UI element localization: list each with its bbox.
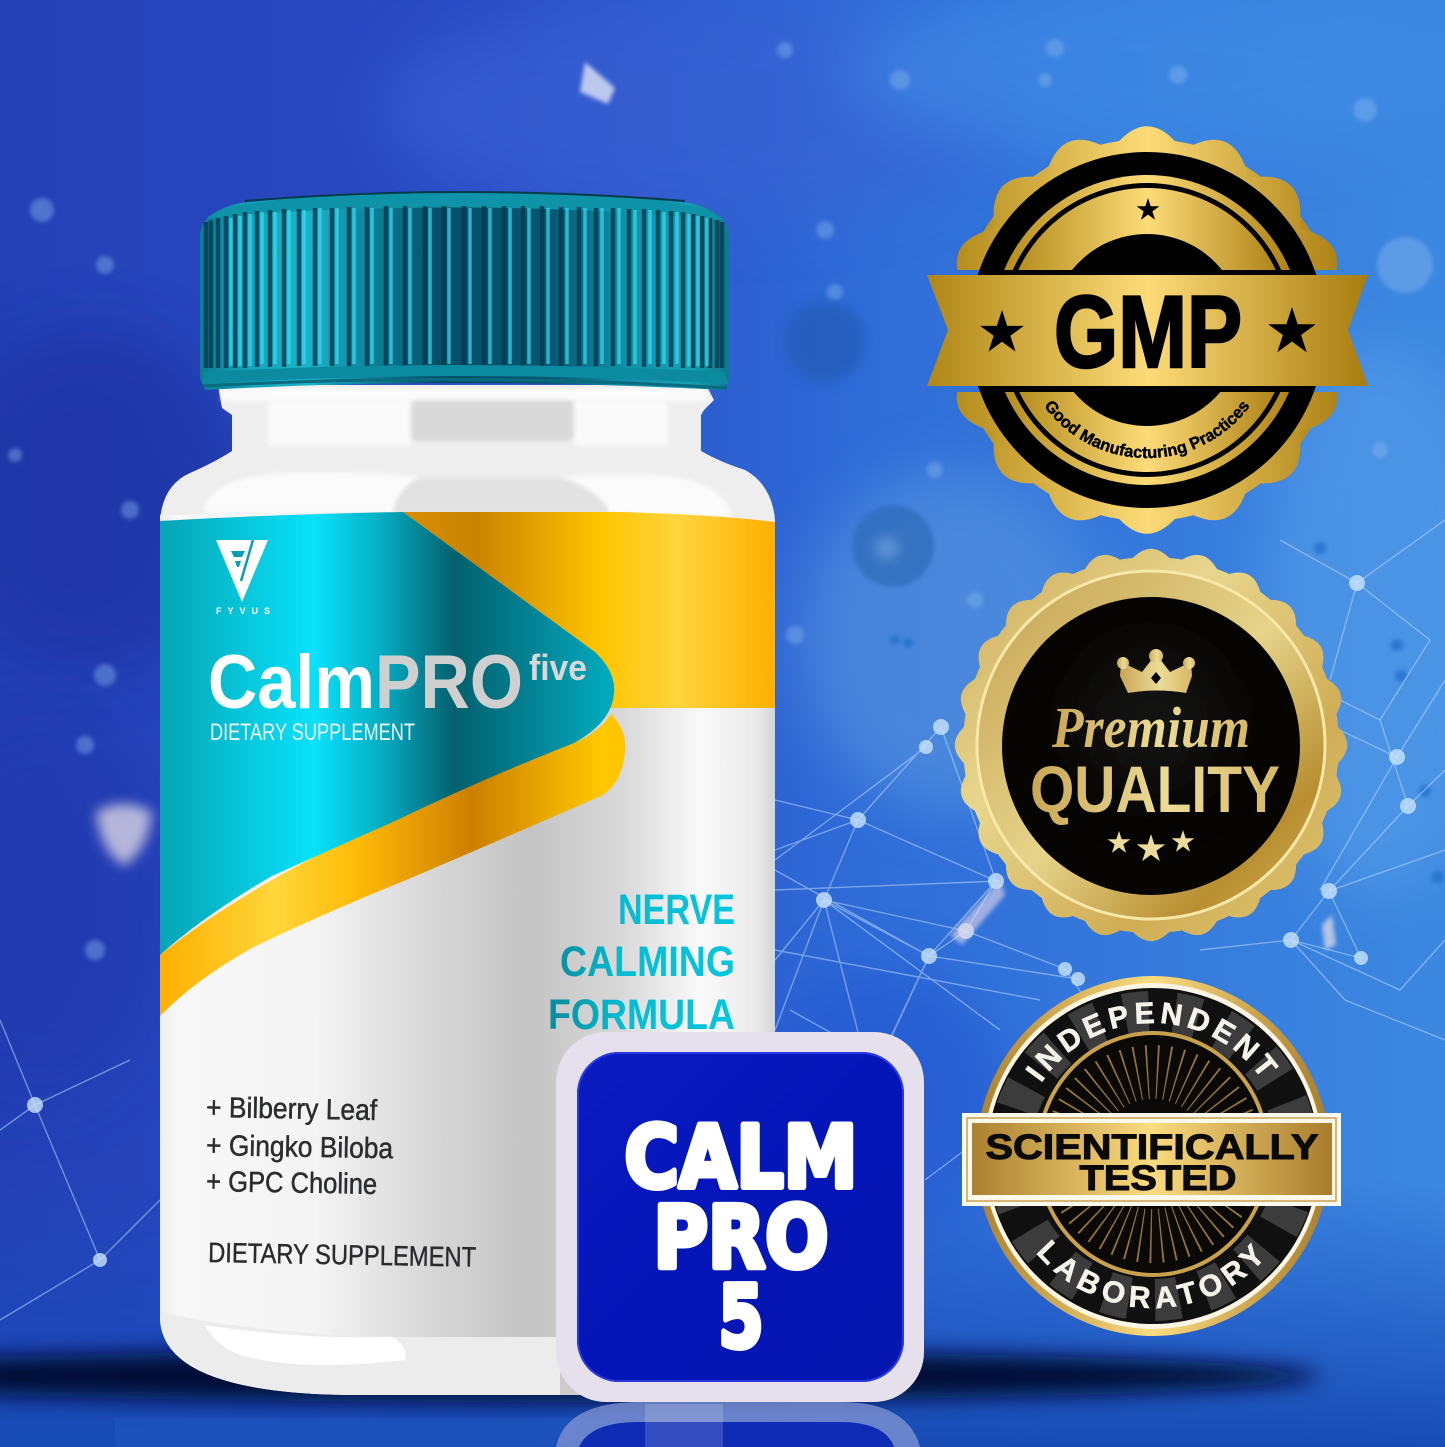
brand logo: FYVUS xyxy=(216,606,276,616)
quality text: QUALITY xyxy=(1030,752,1280,826)
ingredients list: + Bilberry Leaf xyxy=(206,1092,378,1127)
brand logo xyxy=(216,540,276,616)
ribbon xyxy=(962,1113,1341,1206)
label: yellow top band xyxy=(403,512,775,708)
scalloped gold edge xyxy=(943,126,1351,534)
left star xyxy=(980,310,1024,352)
premium text: Premium xyxy=(1051,695,1250,760)
product name: DIETARY SUPPLEMENT xyxy=(210,719,415,746)
gold rings xyxy=(992,175,1302,485)
bottle base shading xyxy=(161,1312,560,1395)
bottle silhouette xyxy=(160,385,775,1395)
calm pro 5 badge xyxy=(556,1032,924,1402)
ingredients list xyxy=(206,1092,394,1201)
claim text: FORMULA xyxy=(548,991,735,1039)
claim text xyxy=(548,886,735,1039)
bottle top highlights xyxy=(203,388,733,518)
scientifically tested seal xyxy=(962,976,1341,1336)
premium quality seal xyxy=(955,549,1347,941)
icon: crown xyxy=(1117,649,1195,693)
scalloped edge xyxy=(955,549,1347,941)
ring segments xyxy=(1009,1012,1297,1300)
ribbon text: TESTED xyxy=(1080,1159,1236,1198)
bottle cap xyxy=(200,192,729,390)
ingredients list: + GPC Choline xyxy=(206,1166,377,1201)
product name: five xyxy=(529,647,587,688)
ribbon text xyxy=(986,1128,1318,1198)
right star xyxy=(1268,307,1316,352)
GMP curved caption: Good Manufacturing Practices xyxy=(1046,401,1249,458)
calm pro 5 badge: 5 xyxy=(718,1268,764,1368)
sunburst xyxy=(1071,1072,1235,1236)
calm pro 5 badge: CALM xyxy=(624,1108,858,1208)
calm pro 5 badge: PRO xyxy=(654,1188,828,1288)
GMP ribbon xyxy=(927,275,1368,386)
product name: CalmPRO xyxy=(208,640,523,725)
badge reflection xyxy=(556,1402,920,1447)
independent curved text: INDEPENDENT xyxy=(1025,1002,1279,1082)
label: orange swoosh xyxy=(160,714,625,1016)
product bottle xyxy=(160,192,775,1395)
top star xyxy=(1137,198,1159,220)
claim text: CALMING xyxy=(560,938,735,986)
stars xyxy=(1108,830,1194,861)
ribbon text: SCIENTIFICALLY xyxy=(986,1128,1318,1167)
laboratory curved text: LABORATORY xyxy=(1036,1239,1262,1309)
GMP text: GMP xyxy=(1054,275,1242,389)
claim text: NERVE xyxy=(618,886,735,934)
label: teal panel xyxy=(160,512,614,955)
bottle lower body xyxy=(160,512,775,1395)
dietary supplement note: DIETARY SUPPLEMENT xyxy=(208,1237,476,1273)
GMP seal xyxy=(927,126,1368,534)
bottle base highlight xyxy=(205,1325,405,1365)
ingredients list: + Gingko Biloba xyxy=(206,1130,394,1165)
